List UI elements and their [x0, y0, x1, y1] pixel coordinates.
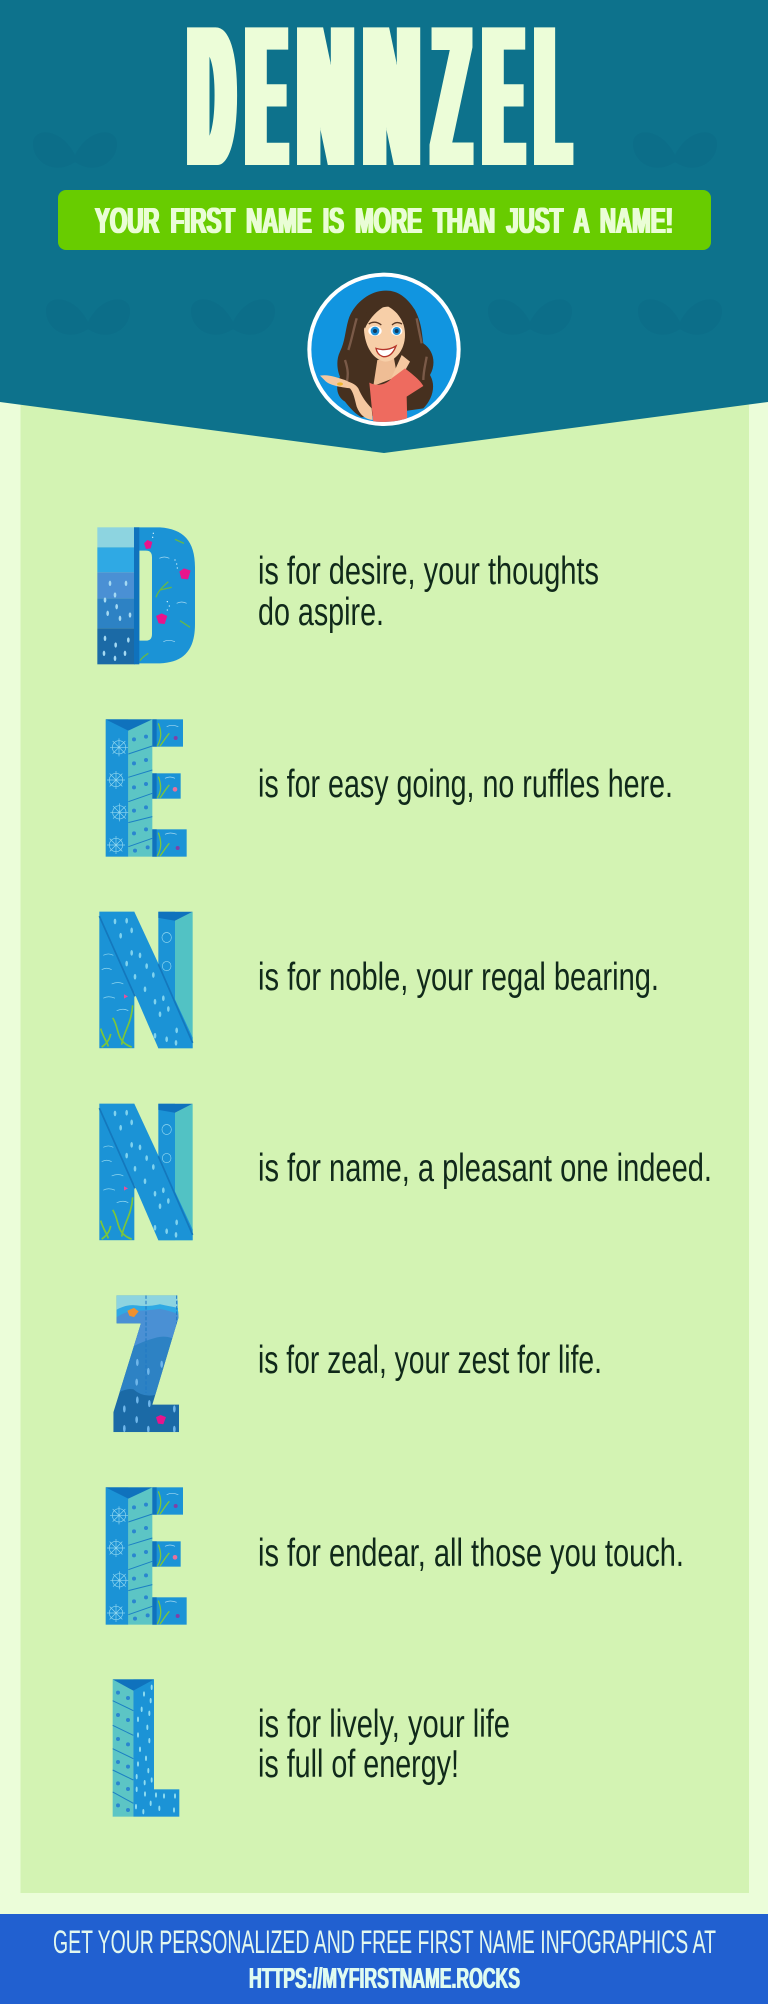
panel: header background [0, 0, 768, 453]
banner [58, 190, 711, 250]
title [190, 0, 568, 209]
icon: letter L [113, 1679, 179, 1817]
icon: letter E [106, 719, 187, 857]
footer url: HTTPS://MYFIRSTNAME.ROCKS [249, 1963, 520, 1995]
footer [0, 1914, 768, 2004]
icon: avatar woman in circle [307, 273, 461, 426]
icon: letter E second [106, 1487, 187, 1625]
panel: content background [20, 380, 749, 1893]
text: D line: is for desire, your thoughts [258, 550, 599, 593]
text: L line: is full of energy! [258, 1743, 459, 1786]
text: D line [258, 550, 599, 634]
text: L line [258, 1703, 510, 1786]
text: L line: is for lively, your life [258, 1703, 510, 1746]
icon: letter D [97, 527, 195, 664]
icon: letter N [99, 912, 193, 1048]
icon: letter N second [99, 1104, 193, 1240]
text: Z line: is for zeal, your zest for life. [258, 1339, 602, 1382]
text: D line: do aspire. [258, 591, 384, 634]
icon: letter Z [113, 1295, 179, 1432]
